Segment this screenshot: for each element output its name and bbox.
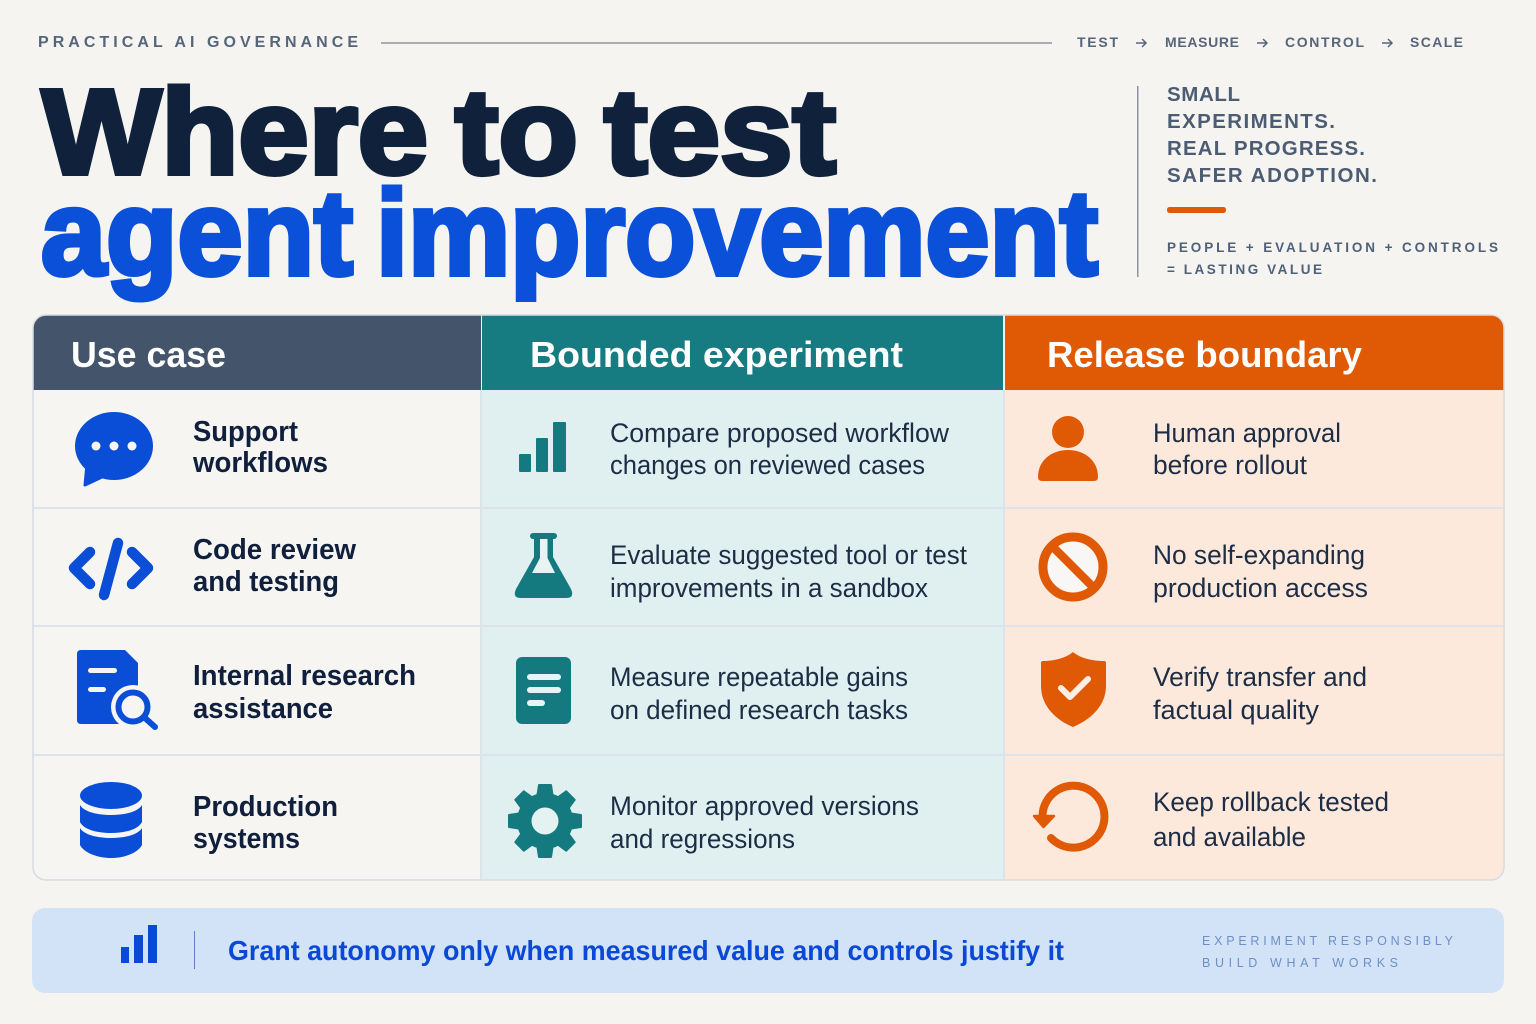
- experiment: measure gains: [610, 662, 908, 725]
- tagline: SMALL: [1167, 83, 1240, 106]
- experiment: evaluate in sandbox: improvements in a sandbox: [610, 573, 928, 603]
- process steps: test, measure, control, scale: SCALE: [1410, 34, 1463, 50]
- title: improvement: [376, 164, 1098, 300]
- experiment: compare workflow changes: [610, 418, 949, 480]
- use case: internal research assistance: assistance: [193, 693, 333, 725]
- process steps: test, measure, control, scale: [1077, 34, 1463, 50]
- use case: code review and testing: and testing: [193, 566, 339, 598]
- experiment: evaluate in sandbox: [610, 540, 967, 603]
- title: test: [604, 64, 836, 200]
- icon: document lines: [516, 657, 571, 724]
- title: agent: [41, 164, 353, 300]
- title: to: [455, 64, 578, 200]
- process steps: test, measure, control, scale: MEASURE: [1165, 34, 1239, 50]
- accent bar: [1167, 207, 1226, 213]
- footer banner: [32, 908, 1504, 993]
- tagline: [1167, 83, 1377, 187]
- use case: code review and testing: [193, 534, 356, 598]
- use case: production systems: [193, 791, 338, 855]
- footer side note: [1202, 934, 1454, 970]
- footer side note: BUILD WHAT WORKS: [1202, 956, 1398, 970]
- title: Where: [42, 64, 428, 200]
- icon: prohibited sign: [1043, 537, 1103, 597]
- icon: person: [1038, 416, 1098, 481]
- use case: code review and testing: Code review: [193, 534, 356, 566]
- boundary: no self-expanding access: No self-expanding: [1153, 540, 1365, 570]
- experiment: monitor versions: [610, 791, 919, 854]
- icon: flask: [515, 533, 572, 598]
- icon: chat bubble: [75, 412, 153, 485]
- boundary: keep rollback: [1153, 787, 1389, 852]
- experiment: monitor versions: Monitor approved versions: [610, 791, 919, 821]
- experiment: compare workflow changes: changes on reviewed cases: [610, 450, 925, 480]
- icon: bar chart: [519, 422, 566, 472]
- footer side note: EXPERIMENT RESPONSIBLY: [1202, 934, 1454, 948]
- use case: production systems: systems: [193, 823, 300, 855]
- experiment: measure gains: on defined research tasks: [610, 695, 908, 725]
- icon: footer bars: [121, 925, 157, 963]
- comparison table: [33, 315, 1504, 880]
- icon: database: [80, 782, 142, 858]
- use case: production systems: Production: [193, 791, 338, 823]
- top label: PRACTICAL AI GOVERNANCE: [38, 34, 358, 51]
- use case: internal research assistance: Internal research: [193, 660, 416, 692]
- tagline: EXPERIMENTS.: [1167, 110, 1335, 133]
- icon: shield check: [1041, 652, 1106, 727]
- icon: code brackets: [74, 543, 148, 595]
- tagline: SAFER ADOPTION.: [1167, 164, 1377, 187]
- column header: use case: Use case: [71, 334, 226, 375]
- use case: internal research assistance: [193, 660, 416, 725]
- process steps: test, measure, control, scale: CONTROL: [1285, 34, 1364, 50]
- footer message: Grant autonomy only when measured value and controls justify it: [228, 935, 1064, 966]
- experiment: measure gains: Measure repeatable gains: [610, 662, 908, 692]
- formula text: PEOPLE + EVALUATION + CONTROLS: [1167, 240, 1498, 255]
- title: [41, 64, 1098, 300]
- boundary: verify transfer: Verify transfer and: [1153, 662, 1367, 692]
- process steps: test, measure, control, scale: TEST: [1077, 34, 1118, 50]
- experiment: monitor versions: and regressions: [610, 824, 795, 854]
- boundary: no self-expanding access: [1153, 540, 1368, 603]
- boundary: verify transfer: [1153, 662, 1367, 725]
- boundary: keep rollback: and available: [1153, 822, 1306, 852]
- boundary: human approval: [1153, 418, 1341, 480]
- boundary: verify transfer: factual quality: [1153, 695, 1319, 725]
- column header: release boundary: Release boundary: [1047, 334, 1362, 375]
- use case: support workflows: workflows: [192, 447, 328, 479]
- boundary: human approval: Human approval: [1153, 418, 1341, 448]
- use case: support workflows: [192, 416, 328, 479]
- use case: support workflows: Support: [193, 416, 298, 448]
- column header: bounded experiment: Bounded experiment: [530, 334, 903, 375]
- boundary: keep rollback: Keep rollback tested: [1153, 787, 1389, 817]
- boundary: human approval: before rollout: [1153, 450, 1307, 480]
- formula text: = LASTING VALUE: [1167, 262, 1322, 277]
- boundary: no self-expanding access: production access: [1153, 573, 1368, 603]
- icon: gear: [509, 785, 581, 857]
- experiment: evaluate in sandbox: Evaluate suggested tool or test: [610, 540, 967, 570]
- experiment: compare workflow changes: Compare proposed workflow: [610, 418, 949, 448]
- icon: document with magnifier: [77, 650, 155, 729]
- tagline: REAL PROGRESS.: [1167, 137, 1365, 160]
- formula text: [1167, 240, 1498, 277]
- icon: rollback arrow: [1034, 786, 1104, 848]
